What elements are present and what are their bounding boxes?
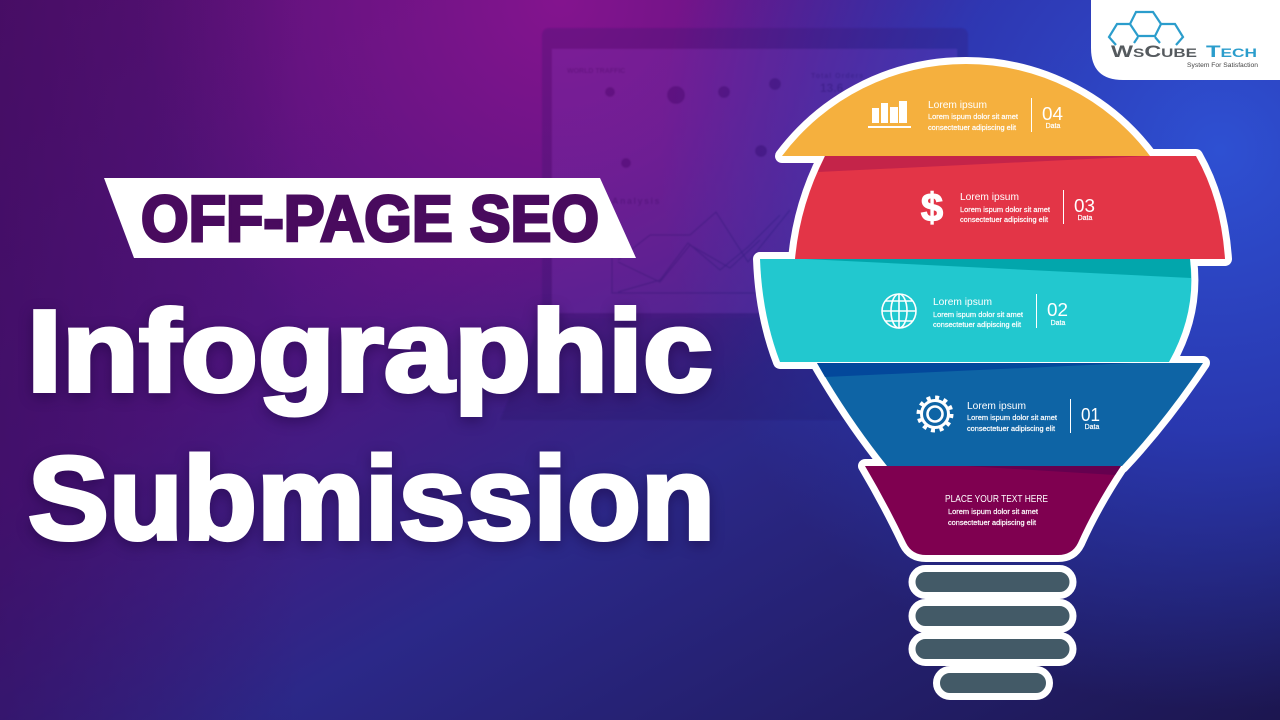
bulb white outline	[760, 64, 1225, 555]
text: lorem ipsum 01: consectetuer adipiscing elit	[967, 426, 1055, 433]
icon: bar chart	[868, 101, 911, 128]
text: place your text here: consectetuer adipiscing elit	[948, 520, 1036, 527]
text: lorem ipsum 03: consectetuer adipiscing elit	[960, 217, 1048, 224]
text: lorem ipsum 04: Lorem ispum dolor sit amet	[928, 114, 1018, 121]
segment 02: teal	[760, 259, 1191, 362]
segment 03: red	[795, 156, 1225, 259]
lightbulb infographic	[760, 64, 1225, 697]
title	[27, 286, 715, 565]
text: lorem ipsum 02: consectetuer adipiscing elit	[933, 322, 1021, 329]
segment 04: orange	[782, 64, 1150, 156]
segment: purple neck	[865, 466, 1121, 555]
text: lorem ipsum 03: Data	[1078, 215, 1092, 222]
icon: dollar sign: $	[921, 186, 943, 230]
text: lorem ipsum 04: Data	[1046, 123, 1060, 130]
text: lorem ipsum 02: Lorem ispum dolor sit amet	[933, 312, 1023, 319]
text: place your text here	[945, 494, 1048, 527]
text: lorem ipsum 02	[933, 294, 1068, 329]
text: lorem ipsum 01: 01	[1081, 405, 1100, 425]
text: lorem ipsum 03: Lorem ispum dolor sit amet	[960, 207, 1050, 214]
text: lorem ipsum 04: Lorem ipsum	[928, 99, 987, 111]
text: place your text here: PLACE YOUR TEXT HERE	[945, 494, 1048, 505]
text: lorem ipsum 01: Lorem ipsum	[967, 400, 1026, 412]
logo panel: Tech	[1206, 43, 1257, 61]
text: lorem ipsum 02: Data	[1051, 320, 1065, 327]
bulb screw base	[912, 568, 1073, 696]
icon: globe	[882, 294, 916, 328]
title: Infographic	[27, 286, 713, 416]
logo panel	[1091, 0, 1280, 80]
blurred laptop photo: WORLD TRAFFIC	[567, 68, 625, 75]
text: lorem ipsum 01	[967, 399, 1100, 433]
text: lorem ipsum 02: 02	[1047, 300, 1068, 320]
text: lorem ipsum 03	[960, 190, 1095, 224]
banner heading: OFF-PAGE SEO	[141, 182, 599, 255]
blurred laptop photo: Analysis	[612, 196, 661, 206]
text: lorem ipsum 01: Data	[1085, 424, 1099, 431]
text: lorem ipsum 02: Lorem ipsum	[933, 296, 992, 308]
text: lorem ipsum 04: consectetuer adipiscing elit	[928, 125, 1016, 132]
banner: off-page seo	[104, 178, 636, 258]
logo hexagons	[1109, 12, 1183, 45]
text: lorem ipsum 04: 04	[1042, 104, 1063, 124]
text: lorem ipsum 03: 03	[1074, 196, 1095, 216]
logo wordmark: WsCube	[1111, 43, 1197, 61]
blurred laptop photo: Total Orders	[811, 73, 864, 80]
text: place your text here: Lorem ispum dolor sit amet	[948, 509, 1038, 516]
text: lorem ipsum 04	[928, 98, 1063, 132]
blurred laptop photo: 13.6	[820, 81, 844, 95]
segment 01: blue	[817, 363, 1203, 466]
icon: gear	[918, 398, 952, 430]
blurred laptop photo	[500, 28, 1000, 420]
title: Submission	[28, 433, 715, 565]
logo tagline: System For Satisfaction	[1187, 62, 1258, 69]
text: lorem ipsum 01: Lorem ispum dolor sit amet	[967, 415, 1057, 422]
text: lorem ipsum 03: Lorem ipsum	[960, 191, 1019, 203]
